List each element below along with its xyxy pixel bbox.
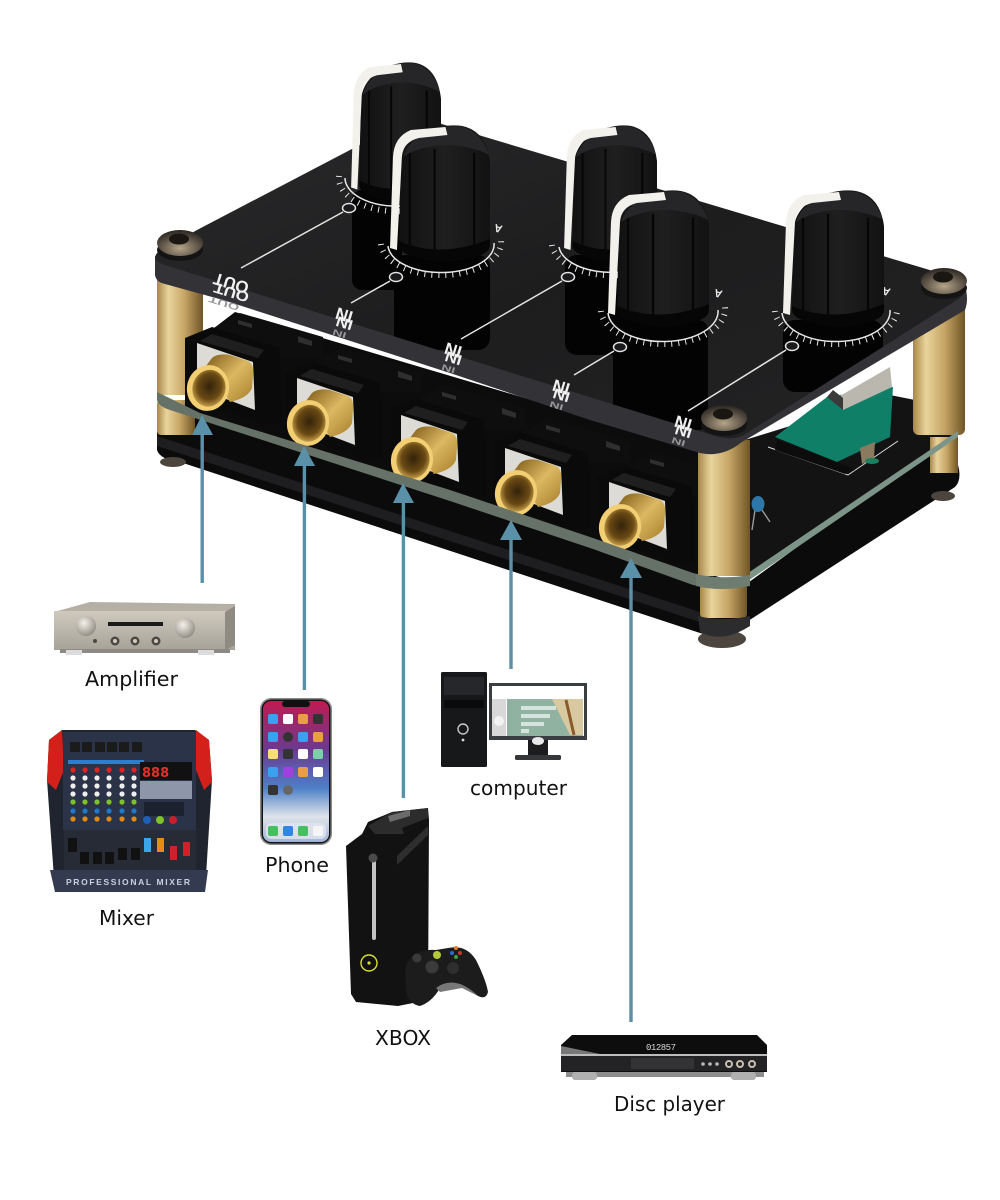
scale arcs — [339, 176, 897, 344]
small direction marks — [493, 221, 892, 300]
silk labels: OUT — [212, 279, 251, 304]
silk labels: IN — [673, 421, 694, 440]
screws — [157, 230, 967, 436]
label: Mixer: Mixer — [99, 906, 155, 930]
top acrylic plate edge — [155, 256, 967, 454]
app icons — [268, 714, 323, 795]
right side PCB surface — [745, 395, 958, 578]
silk labels: IN — [549, 399, 565, 411]
mixer display — [140, 762, 192, 780]
arrow: disc player to input 5 — [620, 558, 642, 1022]
knobs — [351, 62, 884, 326]
silk labels: IN — [671, 435, 687, 447]
device: mixer: 888 — [142, 766, 169, 781]
small direction marks: A — [713, 286, 724, 300]
potentiometer — [752, 367, 898, 530]
dock — [266, 823, 326, 839]
device: disc player — [561, 1035, 767, 1080]
label: Disc player: Disc player — [614, 1092, 726, 1116]
silk labels: OUT — [207, 294, 241, 313]
capacitor — [752, 496, 770, 530]
small direction marks: A — [881, 284, 892, 298]
right rear brass standoff — [913, 298, 965, 473]
silk labels: IN — [334, 313, 355, 332]
bottom plate front corner — [698, 616, 750, 637]
silk labels: IN — [332, 327, 348, 339]
label: Amplifier: Amplifier — [85, 667, 179, 691]
device: amplifier — [54, 602, 235, 655]
arrow: computer to input 4 — [500, 520, 522, 669]
bottom acrylic plate — [157, 405, 959, 636]
silk labels: IN — [333, 303, 355, 326]
label: computer: computer — [470, 776, 568, 800]
silk labels: IN — [551, 385, 572, 404]
jack modules — [182, 313, 735, 564]
front brass standoff — [698, 440, 750, 618]
channel lines — [241, 204, 798, 411]
arrow: phone to input 2 — [294, 446, 315, 690]
silk labels — [207, 269, 694, 447]
front corner of PCB over standoff — [696, 574, 750, 589]
device: mixer: PROFESSIONAL MIXER — [66, 877, 190, 887]
product: audio mixer unit — [155, 62, 967, 648]
device: phone — [260, 698, 332, 845]
small direction marks: A — [493, 221, 504, 235]
device: computer — [441, 672, 587, 767]
silk labels: IN — [441, 362, 457, 374]
silk labels: IN — [672, 411, 694, 434]
device: xbox — [346, 808, 488, 1006]
arrow: amplifier to input 1 — [192, 415, 213, 583]
label: Phone: Phone — [265, 853, 329, 877]
silk labels: OUT — [211, 269, 251, 297]
label: XBOX: XBOX — [375, 1026, 431, 1050]
top acrylic plate surface — [155, 116, 966, 438]
bottom plate edge sheen — [157, 436, 745, 622]
channel knobs — [68, 742, 144, 822]
device: disc player: 012857 — [646, 1043, 676, 1053]
right glass PCB edge — [745, 431, 958, 583]
middle PCB edge — [157, 392, 745, 589]
silk labels: IN — [442, 338, 464, 361]
faders — [68, 838, 140, 864]
device: mixer — [47, 730, 212, 892]
silk labels: IN — [443, 348, 464, 367]
knob reflections — [352, 190, 883, 430]
silk labels: IN — [550, 375, 572, 398]
arrow: xbox to input 3 — [393, 483, 414, 798]
black interior behind jacks — [185, 312, 700, 578]
left brass standoff — [157, 270, 203, 435]
feet — [160, 457, 955, 648]
